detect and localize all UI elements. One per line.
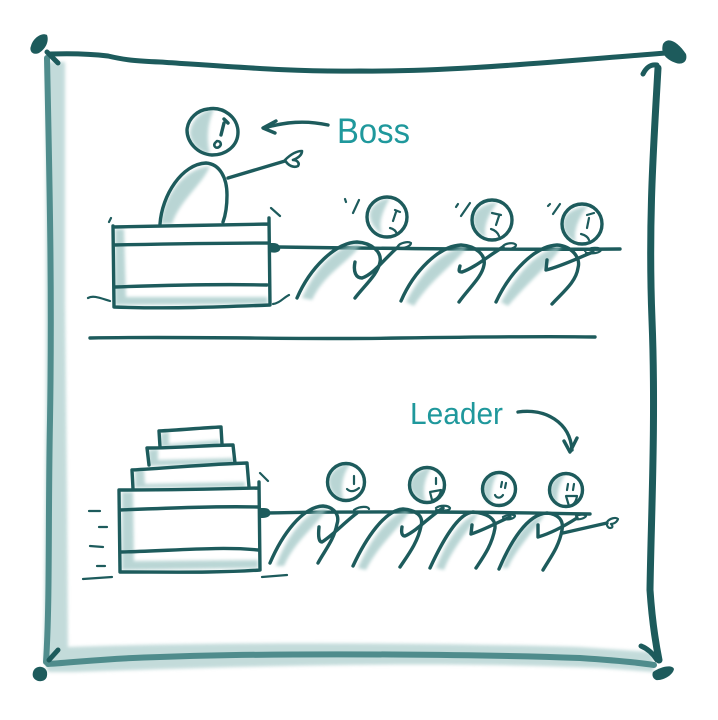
worker 1 [297,197,411,300]
worker A [270,463,364,566]
rope [266,512,590,514]
leader worker [499,474,618,570]
worker 3 [496,204,602,306]
heavy box [88,208,289,308]
label: Leader: Leader [410,396,503,431]
worker 2 [401,200,516,306]
worker B [353,467,450,570]
boss body and pointing arm [160,151,302,224]
arrow: Leader to front worker [518,411,577,452]
divider line [90,337,595,339]
arrow: Boss to head [263,121,328,133]
boss head [187,109,238,155]
label: Boss: Boss [337,112,410,151]
worker C [430,472,516,570]
rope [278,247,620,249]
bottom scene: stacked boxes [83,427,287,579]
top scene: boss on box [83,109,620,579]
